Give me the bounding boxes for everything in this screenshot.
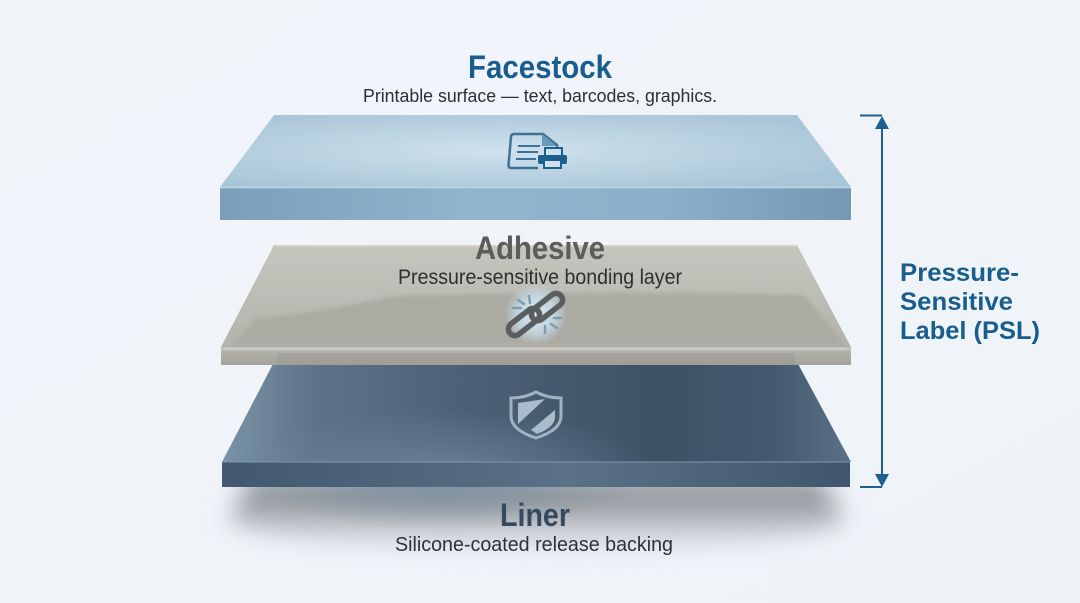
heading: Facestock [363,49,717,106]
text: Facestock description: Printable surface — text, barcodes, graphics. [363,85,717,106]
text: Liner description: Silicone-coated release backing [395,533,673,556]
heading: Liner: Liner [500,497,570,533]
label: Pressure-Sensitive Label (PSL): Pressure- [900,259,1019,287]
icon: shield [511,392,561,438]
dimension arrow [860,116,889,487]
heading: Adhesive: Adhesive [475,230,605,266]
adhesive layer [221,245,851,365]
heading: Adhesive [398,230,682,289]
label: Pressure-Sensitive Label (PSL): Sensitive [900,288,1013,316]
liner layer [222,362,851,530]
heading: Liner [395,497,673,556]
label: Pressure-Sensitive Label (PSL) [900,259,1040,345]
icon: chain link with glow [505,283,567,345]
heading: Facestock: Facestock [468,49,612,85]
facestock layer [220,115,851,220]
icon: document and printer [508,134,567,168]
label: Pressure-Sensitive Label (PSL): Label (PSL) [900,317,1040,345]
text: Adhesive description: Pressure-sensitive bonding layer [398,266,682,289]
liner shadow [228,480,846,552]
